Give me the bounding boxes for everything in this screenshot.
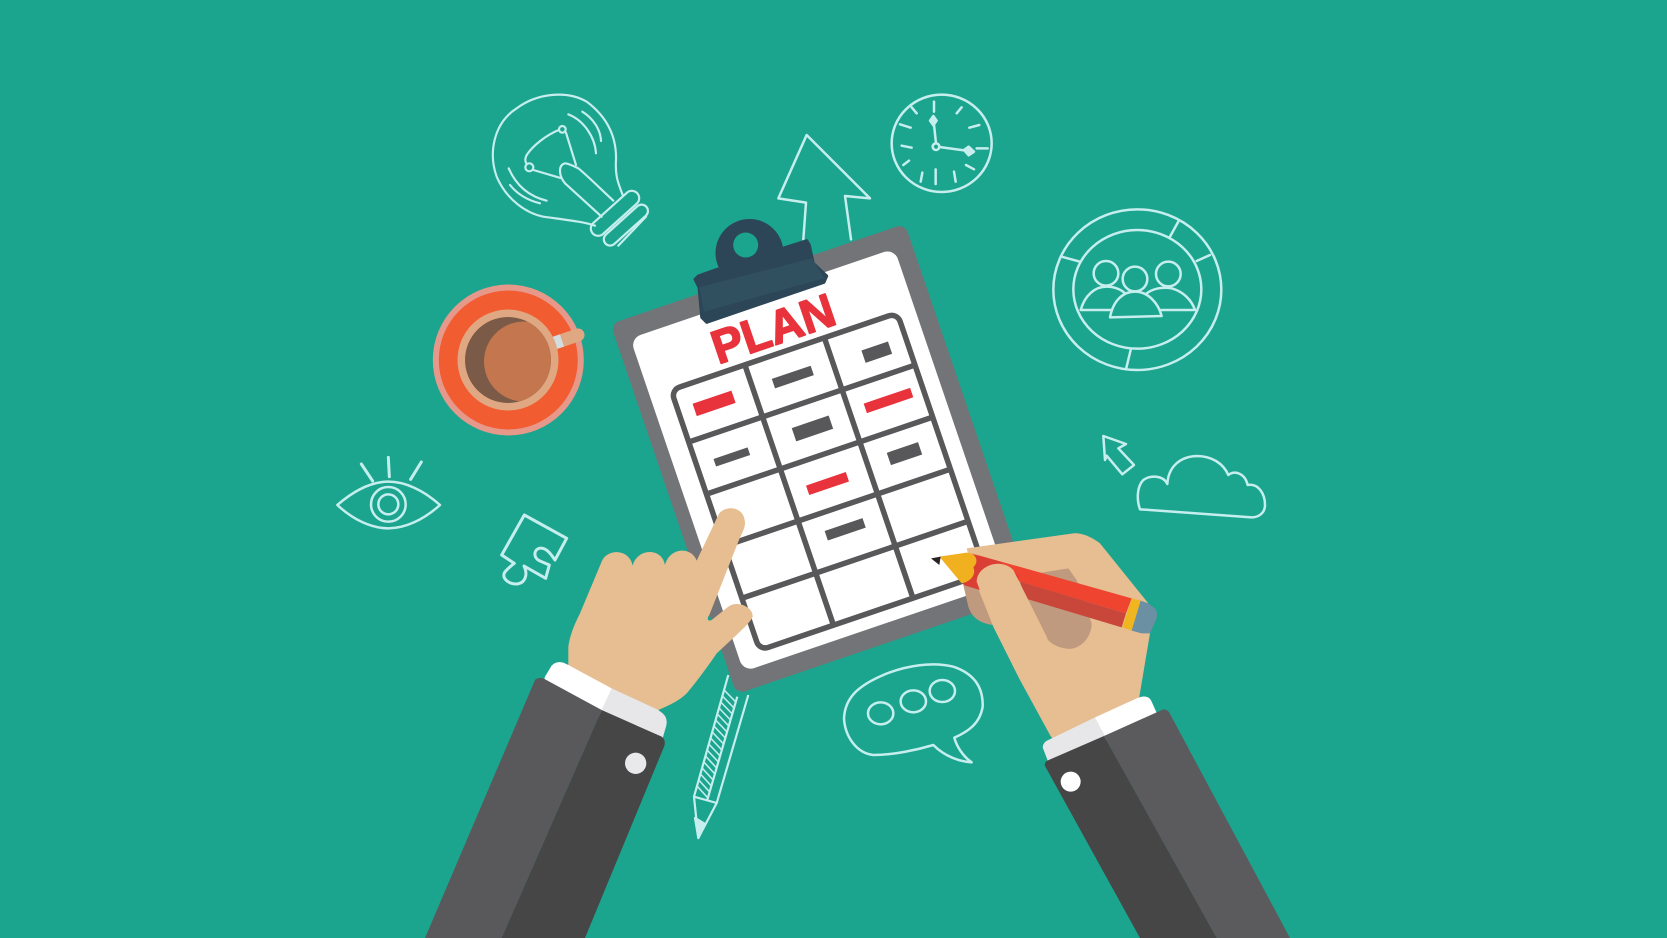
icon: light bulb <box>493 95 651 248</box>
right thumb <box>977 564 1053 683</box>
icon: clock <box>892 95 992 192</box>
right shirt cuff <box>1043 696 1158 767</box>
icon: coffee cup on saucer <box>433 284 584 436</box>
right jacket sleeve <box>1045 709 1290 938</box>
left arm <box>425 508 753 938</box>
icon: up arrow <box>778 135 870 239</box>
icon: cursor arrow <box>1103 436 1134 474</box>
left hand pointing <box>568 508 753 723</box>
icon: team circle <box>1053 209 1221 370</box>
icon: puzzle piece <box>502 515 567 584</box>
board <box>610 224 1031 694</box>
clipboard clip <box>695 219 827 322</box>
right hand base and shadow <box>963 533 1150 750</box>
left shirt cuff <box>543 662 667 742</box>
clipboard <box>610 219 1031 694</box>
left jacket sleeve <box>425 678 665 938</box>
right arm <box>931 533 1290 938</box>
icon: sketched pencil <box>694 675 748 838</box>
illustration: planning scene <box>336 93 1290 938</box>
heading: PLAN: PLAN <box>704 283 842 374</box>
plan grid <box>671 313 986 650</box>
icon: cloud <box>1138 456 1265 517</box>
icon: eye <box>337 457 440 528</box>
paper sheet <box>630 248 1008 672</box>
icon: speech bubble <box>844 664 983 762</box>
red pencil <box>931 553 1157 633</box>
